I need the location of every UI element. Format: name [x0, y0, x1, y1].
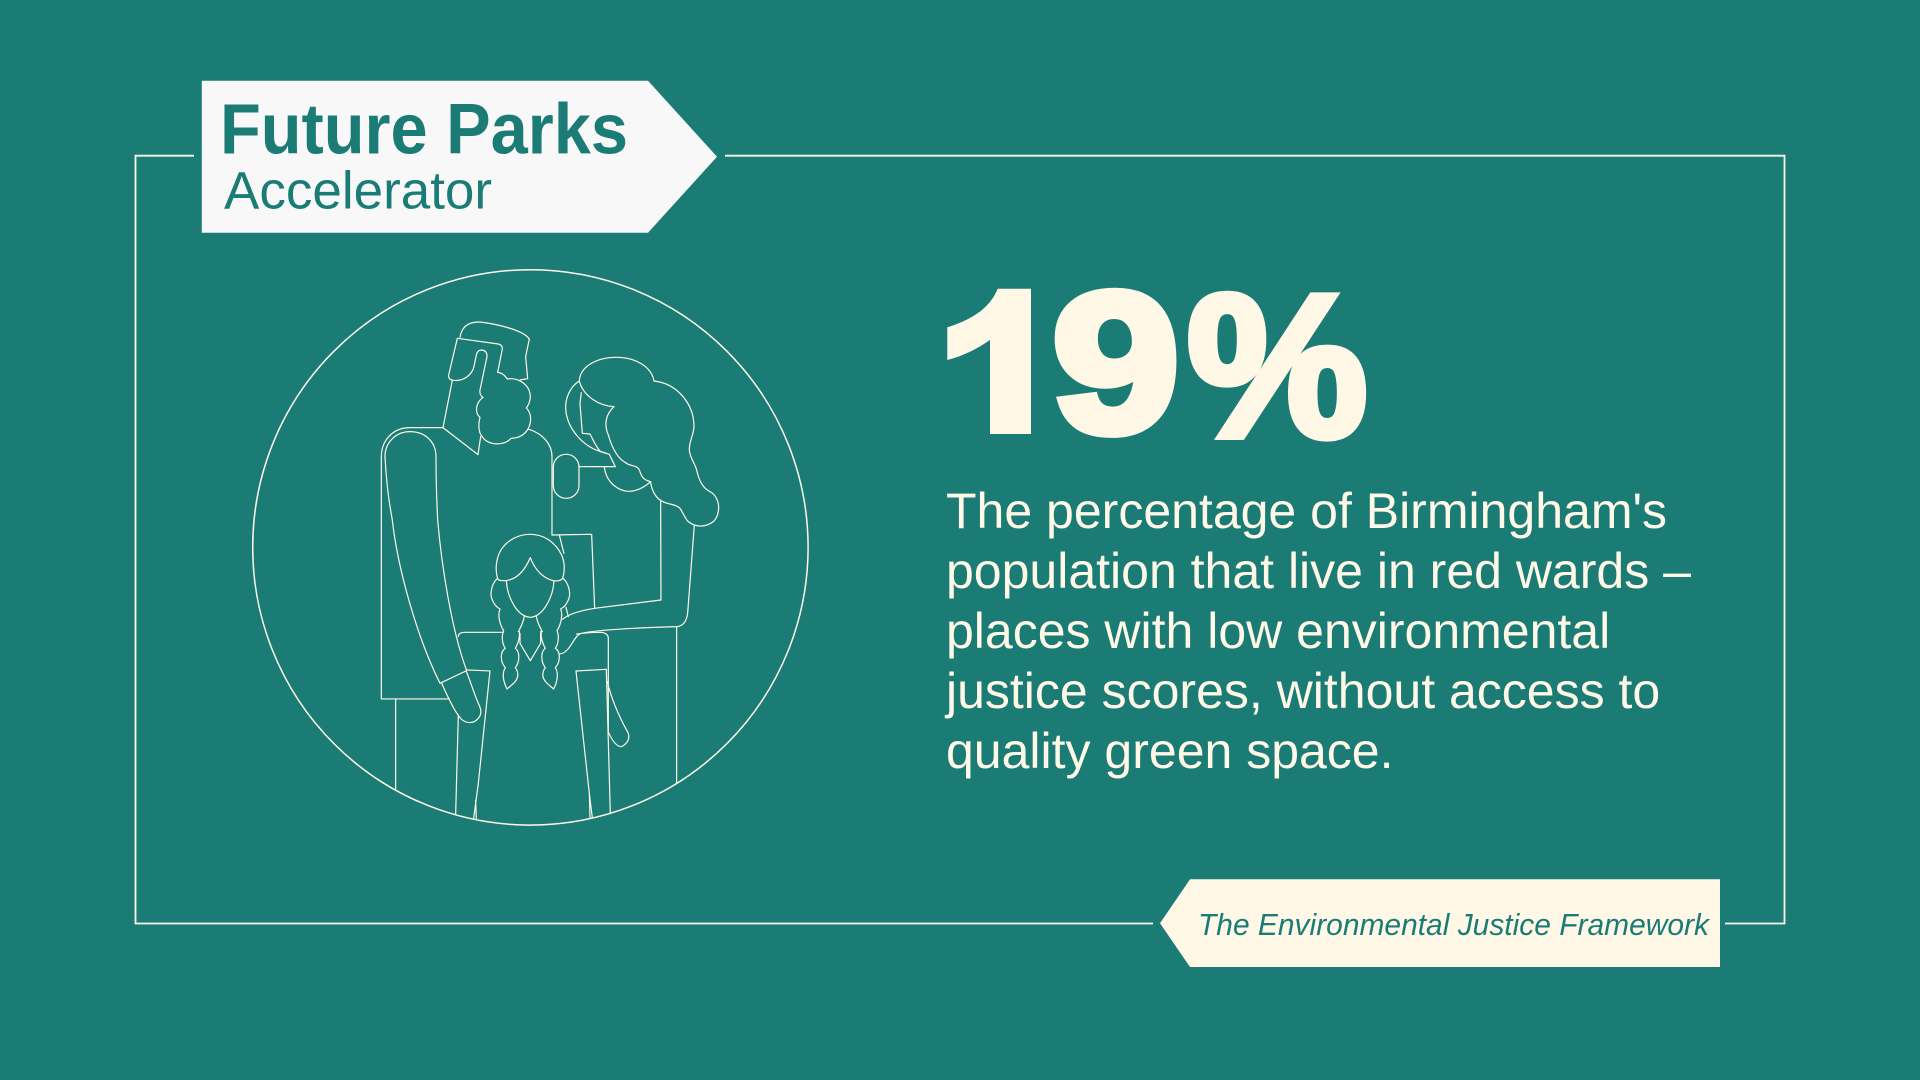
- source banner: [1160, 879, 1720, 967]
- big statistic: 19%: %: [1187, 253, 1368, 480]
- figure: girl: [458, 534, 629, 818]
- description text: quality green space.: [946, 723, 1394, 779]
- description text: justice scores, without access to: [944, 663, 1660, 719]
- circle outline: [253, 270, 808, 825]
- big statistic: 19%: 9: [1052, 253, 1179, 474]
- title banner: [202, 81, 717, 233]
- figure: man: [381, 322, 552, 819]
- description text: [944, 483, 1691, 779]
- big statistic: 19%: 1: [950, 251, 1063, 478]
- description text: The percentage of Birmingham's: [946, 483, 1667, 539]
- source text: The Environmental Justice Framework: [1198, 907, 1710, 942]
- big statistic: 19%: [947, 288, 1366, 442]
- frame outline: [136, 156, 1784, 923]
- illustration: family in a circle: [253, 270, 808, 825]
- description text: population that live in red wards –: [946, 543, 1691, 599]
- subtitle: Accelerator: Accelerator: [224, 161, 492, 220]
- description text: places with low environmental: [946, 603, 1610, 659]
- title: Future Parks: Future Parks: [220, 90, 628, 169]
- figure: woman: [552, 357, 719, 783]
